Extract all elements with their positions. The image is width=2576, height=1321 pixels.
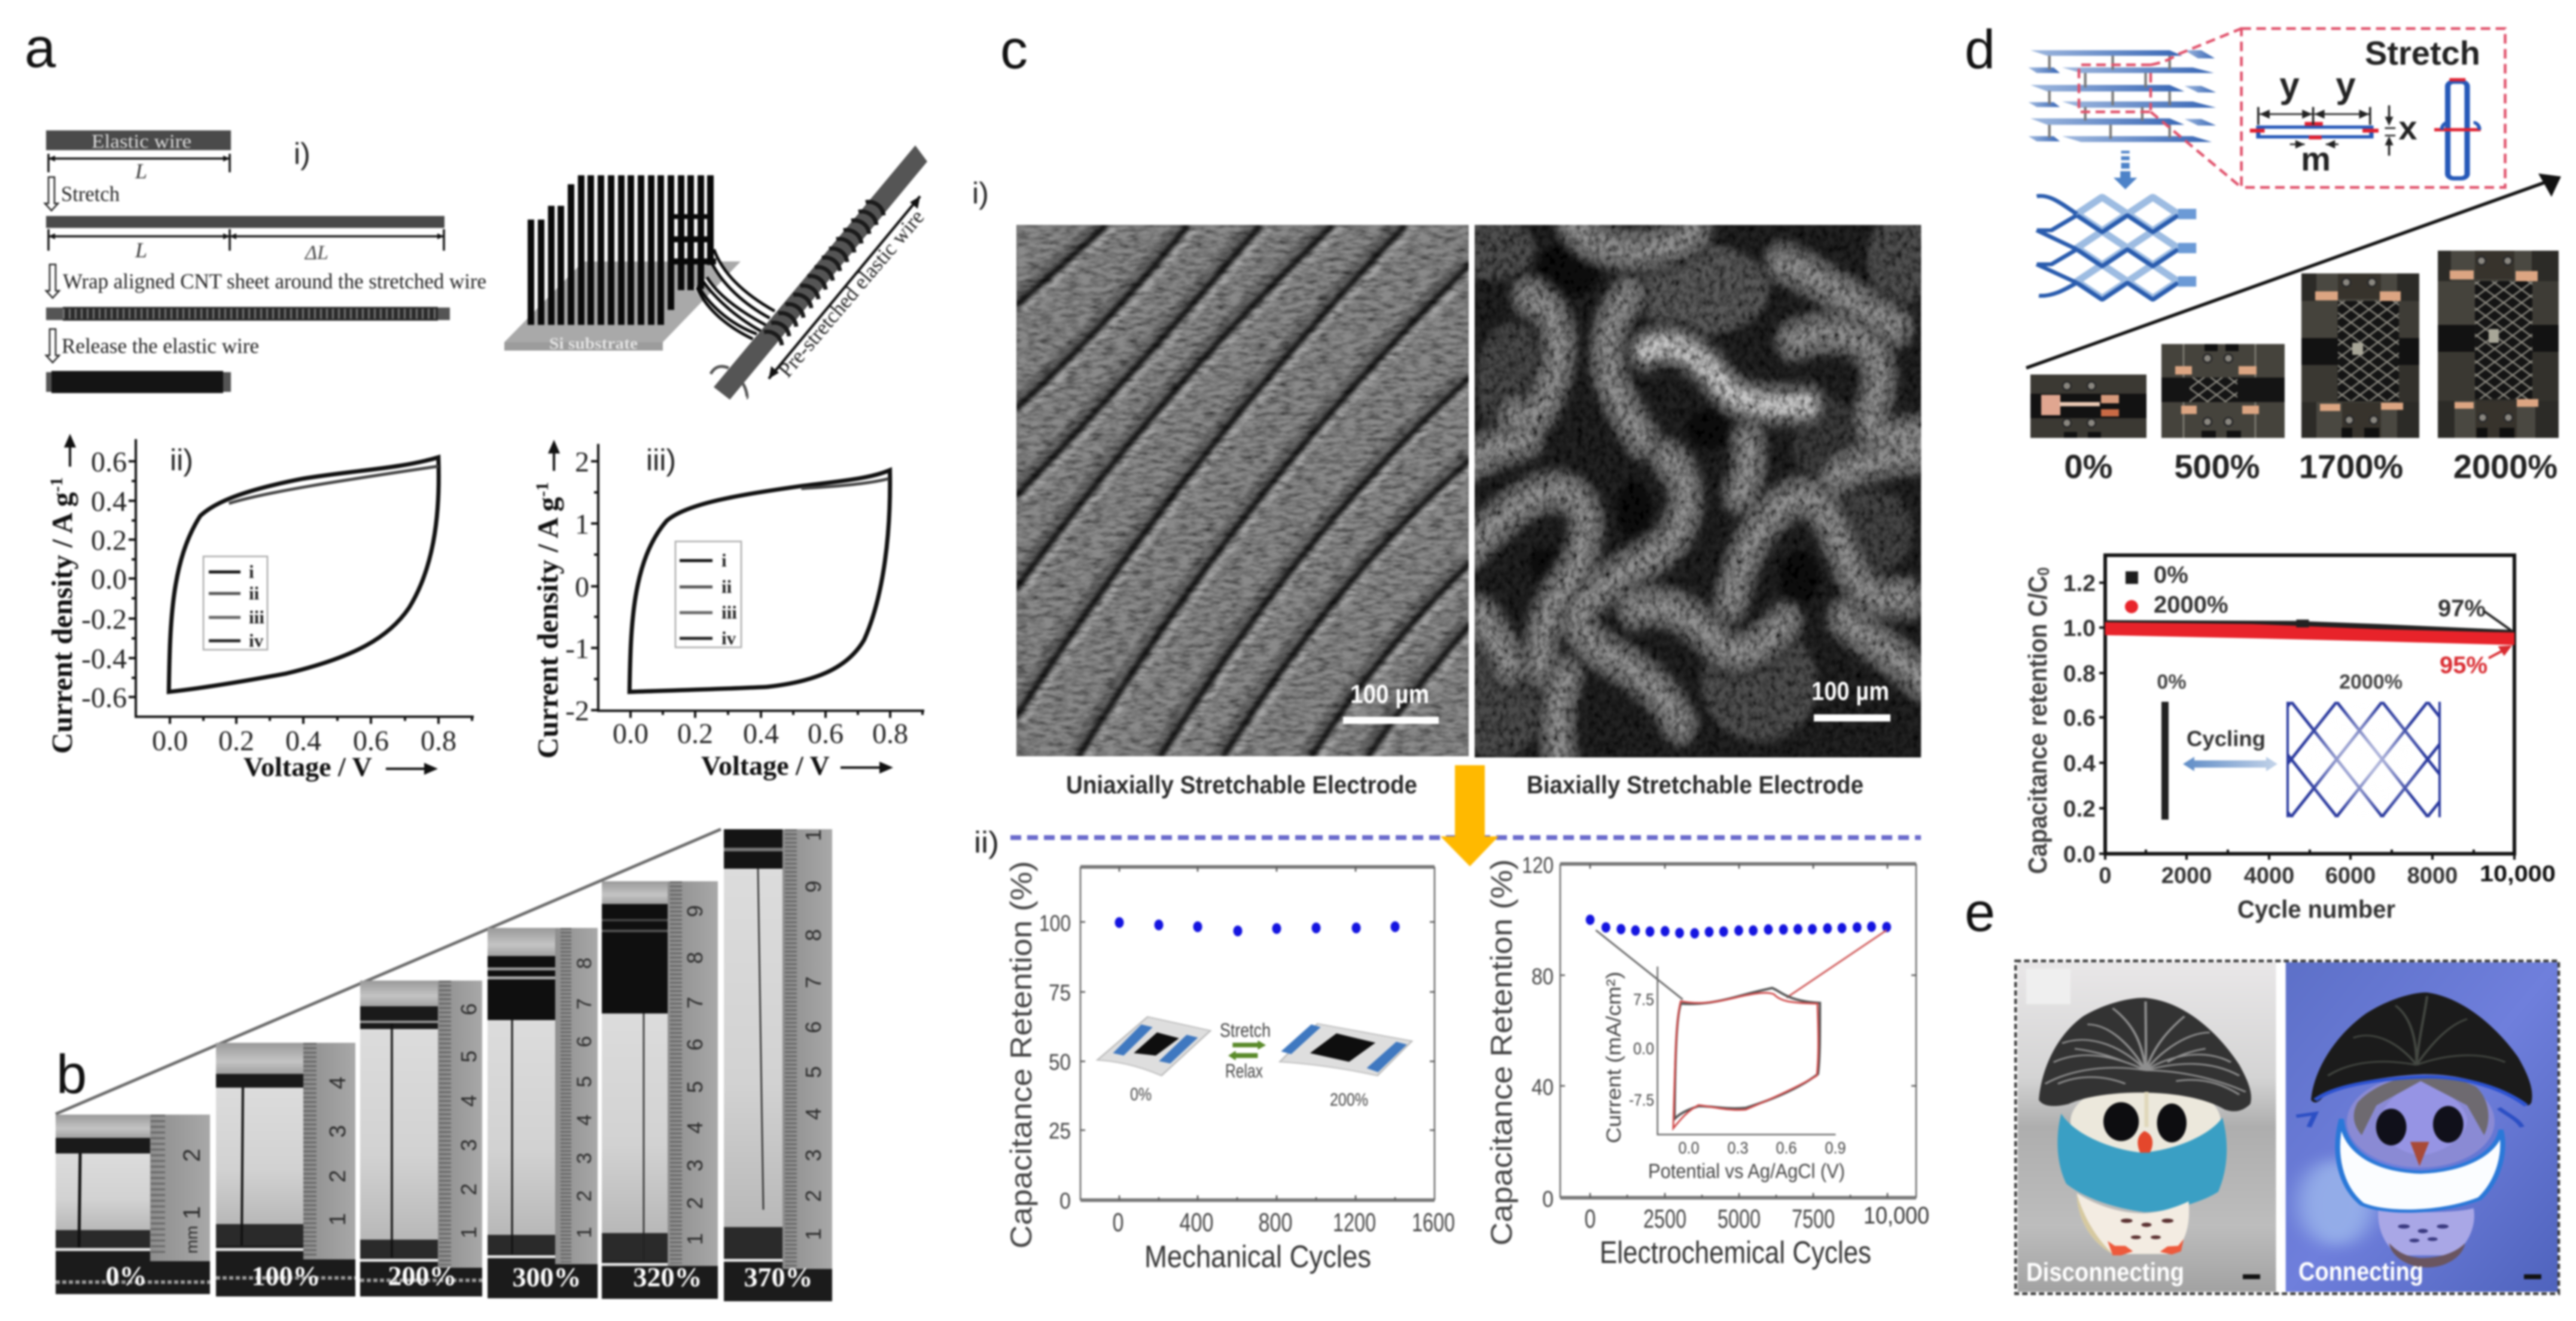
x tick labels <box>152 725 456 757</box>
y tick labels: 50 <box>1049 1050 1071 1075</box>
wire curl arrows <box>711 366 747 398</box>
inset: CV curve: -7.5 <box>1629 1091 1654 1109</box>
panel a i: fabrication schematic: L <box>135 238 147 262</box>
chart: electrochemical cycles <box>1485 853 1929 1270</box>
x tick label: 10,000: 10,000 <box>2480 862 2556 887</box>
legend: 0% <box>2154 562 2188 588</box>
y tick labels <box>1039 911 1071 1214</box>
diagram labels: y <box>2336 65 2356 105</box>
inset: stretch device <box>1097 1017 1412 1110</box>
photo: d 0% <box>2030 375 2146 438</box>
strain labels: 500% <box>2174 448 2260 485</box>
inset: CV curve: Potential vs Ag/AgCl (V) <box>1648 1160 1845 1183</box>
y tick labels: -0.2 <box>81 604 127 635</box>
photo: 300%: 300% <box>512 1262 581 1292</box>
photo: 370%: 3 <box>801 1149 826 1161</box>
y tick labels: 0 <box>1542 1187 1554 1212</box>
annotation: 95% <box>2440 647 2510 678</box>
y tick labels: 1.0 <box>2063 616 2096 641</box>
panel a i: fabrication schematic <box>45 130 486 393</box>
x tick labels: 400 <box>1180 1208 1213 1237</box>
y tick labels: -1 <box>565 633 589 665</box>
x tick labels: 8000 <box>2407 863 2458 888</box>
x tick labels: 2500 <box>1643 1204 1686 1234</box>
trend arrow <box>2026 174 2561 368</box>
photo: 320%: 5 <box>683 1081 707 1093</box>
y tick labels <box>2063 571 2096 868</box>
photo: 0%: 2 <box>179 1149 205 1162</box>
chart: a iii CV curves <box>531 443 924 781</box>
photo caption: connecting: Connecting <box>2298 1257 2423 1286</box>
schematic: CNT forest and pre-stretched wire <box>504 145 929 400</box>
wrapped wire <box>46 307 450 321</box>
x tick labels <box>2099 863 2458 888</box>
photo: d 1700% <box>2301 273 2419 438</box>
panel label: d: d <box>1965 19 1995 80</box>
photo: 320%: 6 <box>683 1039 707 1051</box>
y tick labels: 0.2 <box>91 525 127 556</box>
plot frame <box>2105 555 2514 854</box>
y tick labels: 100 <box>1039 911 1071 936</box>
annotation: 95%: 95% <box>2440 652 2487 678</box>
photo: 370%: 2 <box>801 1190 826 1202</box>
photo: 320%: 8 <box>683 952 707 964</box>
photo: 200%: 2 <box>456 1183 481 1195</box>
x tick labels: 2000 <box>2161 863 2212 888</box>
x tick labels: 0.0 <box>613 718 648 750</box>
inset: cycling diagram: 2000% <box>2339 671 2403 693</box>
diagram labels: m <box>2301 140 2331 178</box>
photo: d 2000% <box>2438 251 2559 438</box>
photo: 200%: 1 <box>456 1226 481 1238</box>
step label: wrap: Wrap aligned CNT sheet around the stretched wire <box>63 269 486 293</box>
CNT sheet strands <box>697 249 775 339</box>
chart: a ii CV curves <box>45 437 474 782</box>
x tick labels: 4000 <box>2244 863 2294 888</box>
strain labels: 2000% <box>2453 448 2557 485</box>
inset: cycling diagram: 0% <box>2157 671 2187 693</box>
y tick labels: 0 <box>575 571 589 603</box>
y axis title: Current density / A g <box>531 497 564 759</box>
double arrow along wire <box>769 196 920 379</box>
x axis title: Mechanical Cycles <box>1144 1240 1371 1274</box>
annotation: 97% <box>2438 595 2511 631</box>
photo: 300%: 8 <box>573 958 596 969</box>
y axis title: Current density / A g <box>45 492 78 754</box>
y axis title: Capacitance retention C/C <box>2023 546 2053 874</box>
y tick labels: 75 <box>1049 981 1071 1006</box>
sub-label: c i: i) <box>972 176 989 210</box>
y arrow <box>550 443 558 471</box>
step label: stretch: Stretch <box>61 182 120 206</box>
sub-label: c ii: ii) <box>974 826 999 859</box>
photo: 300%: 3 <box>573 1153 596 1164</box>
y tick labels: 0.4 <box>91 486 127 518</box>
x axis title: Voltage / V <box>701 750 830 781</box>
y tick labels: 0.0 <box>91 564 127 595</box>
micrograph: uniaxial electrode <box>1015 225 1479 760</box>
photo: 370%: 1 <box>801 829 826 841</box>
CNT forest bars <box>528 175 716 325</box>
data points <box>1586 915 1891 939</box>
x tick labels: 0 <box>2099 863 2112 888</box>
inset: CV curve: 0.0 <box>1679 1139 1699 1157</box>
legend: ii <box>721 576 732 597</box>
data bands <box>2105 620 2514 645</box>
y tick labels: 120 <box>1522 853 1554 878</box>
step label: release: Release the elastic wire <box>62 334 259 358</box>
y tick labels: 1.2 <box>2063 571 2096 596</box>
strain labels <box>2065 448 2557 485</box>
panel label: a: a <box>25 16 56 79</box>
x tick labels: 7500 <box>1792 1204 1835 1234</box>
photo: 100%: 3 <box>325 1125 351 1138</box>
photo: 300%: 2 <box>573 1191 596 1201</box>
hollow arrow: wrap <box>46 264 59 298</box>
photo: 370%: 4 <box>801 1108 826 1120</box>
legend: iii <box>249 607 264 628</box>
photo: 200%: 5 <box>456 1051 481 1063</box>
x tick labels: 0.6 <box>808 718 844 750</box>
wire label: Pre-stretched elastic wire <box>774 205 929 382</box>
photo: 320%: 1 <box>683 1233 707 1245</box>
inset: CV curve: 0.9 <box>1825 1139 1846 1157</box>
inset: stretch device: 0% <box>1130 1085 1152 1104</box>
photo: 300%: 4 <box>573 1115 596 1125</box>
photo: 370% <box>724 829 832 1301</box>
axes <box>591 444 924 718</box>
scale bar: left <box>2243 1274 2260 1279</box>
legend <box>675 541 741 649</box>
scale bar <box>1343 717 1439 724</box>
scale label: 100 µm <box>1350 680 1429 709</box>
legend <box>2125 562 2228 618</box>
sub-label: a i: i) <box>294 137 310 171</box>
x tick labels <box>613 718 908 750</box>
Si substrate: Si substrate <box>549 334 638 352</box>
photo: 320% <box>602 881 718 1299</box>
photo: 370%: 7 <box>801 976 826 988</box>
y tick labels: 80 <box>1531 964 1554 990</box>
x tick labels: 0.8 <box>872 718 908 750</box>
y tick labels <box>1522 853 1554 1212</box>
hollow arrow: release <box>46 329 59 363</box>
panel a i: fabrication schematic: L <box>135 159 147 183</box>
inset: CV curve: 0.3 <box>1728 1139 1748 1157</box>
photo: 320%: 4 <box>683 1122 707 1134</box>
x axis title: Cycle number <box>2237 895 2395 923</box>
elastic wire bar <box>46 130 231 153</box>
unit cell <box>2250 105 2395 156</box>
legend: ii <box>249 583 260 604</box>
dashed divider <box>1010 835 1921 840</box>
photo: 320%: 320% <box>633 1262 702 1292</box>
scale bar: right <box>2524 1274 2541 1279</box>
legend: i <box>721 550 727 571</box>
panel b: stretching photos <box>56 829 832 1301</box>
legend: iv <box>249 630 264 651</box>
diagram labels: Stretch <box>2365 34 2480 72</box>
panel label: c: c <box>1000 19 1028 80</box>
legend: iii <box>721 602 737 623</box>
mesh <box>2037 196 2196 300</box>
photo: 370%: 8 <box>801 929 826 941</box>
photo: 370%: 6 <box>801 1021 826 1033</box>
x tick labels: 800 <box>1259 1208 1292 1237</box>
plot frame <box>1560 864 1916 1198</box>
y tick labels: 0.8 <box>2063 661 2096 687</box>
chart: capacitance retention <box>2023 555 2556 923</box>
x tick labels <box>1113 1208 1455 1237</box>
photo: 0%: 1 <box>179 1206 205 1219</box>
photo: 320%: 2 <box>683 1197 707 1209</box>
x tick labels: 1200 <box>1333 1208 1376 1237</box>
x tick labels <box>1584 1204 1835 1234</box>
stacked sheets <box>2028 50 2216 142</box>
strain labels: 0% <box>2065 448 2112 485</box>
panel label: e: e <box>1965 882 1995 943</box>
inset: stretch device: Stretch <box>1220 1019 1271 1041</box>
Si substrate <box>504 261 741 352</box>
y tick labels: 0.6 <box>91 446 127 478</box>
curves <box>629 470 890 692</box>
diagram labels <box>2279 34 2480 178</box>
photo: 370%: 9 <box>801 881 826 893</box>
photo: 100%: 100% <box>251 1261 321 1291</box>
inset: cycling diagram <box>2157 671 2440 820</box>
yellow arrow <box>1441 765 1499 866</box>
curves <box>169 457 439 692</box>
x tick labels: 6000 <box>2325 863 2376 888</box>
trend line over strain photos <box>56 829 721 1114</box>
photo: 0%: 0% <box>105 1261 147 1291</box>
elastic wire <box>714 145 927 400</box>
photo: 370%: 370% <box>744 1262 812 1292</box>
x tick labels: 0 <box>1584 1204 1596 1234</box>
x tick label: 10,000: 10,000 <box>1864 1203 1929 1229</box>
photo: 100%: 2 <box>325 1170 351 1183</box>
y axis title: -1 <box>47 477 66 492</box>
y tick labels <box>81 446 127 714</box>
photo caption: disconnecting: Disconnecting <box>2026 1258 2184 1287</box>
diagram labels: x <box>2398 109 2417 147</box>
photo: 300%: 6 <box>573 1036 596 1047</box>
photo: disconnecting <box>2018 962 2276 1292</box>
y axis title: -1 <box>532 482 552 497</box>
photo: 0% <box>56 1115 210 1294</box>
diagram labels: y <box>2279 65 2300 105</box>
legend: i <box>249 561 254 582</box>
y tick labels: 25 <box>1049 1119 1071 1144</box>
released wire <box>46 371 231 393</box>
photo: 320%: 3 <box>683 1159 707 1171</box>
y arrow <box>66 437 74 467</box>
x tick labels: 5000 <box>1718 1204 1761 1234</box>
x tick labels: 1600 <box>1412 1208 1455 1237</box>
legend <box>203 556 267 651</box>
photo: 200%: 4 <box>456 1095 481 1107</box>
photo: d 500% <box>2161 344 2285 438</box>
sub-label: iii) <box>646 443 676 477</box>
data points <box>1115 917 1400 936</box>
inset: CV curve: Current (mA/cm²) <box>1603 972 1625 1143</box>
photo: 370%: 5 <box>801 1066 826 1078</box>
legend: 2000% <box>2154 592 2228 618</box>
inset: CV curve: 0.0 <box>1633 1039 1654 1058</box>
chart: mechanical cycles <box>1004 861 1455 1274</box>
y tick labels: 40 <box>1531 1075 1554 1100</box>
y axis title: Capacitance Retention (%) <box>1485 859 1518 1246</box>
wrapped CNT on wire <box>764 202 884 345</box>
scale bar <box>1814 714 1890 722</box>
photo: 100% <box>216 1043 355 1296</box>
axes <box>129 439 474 724</box>
y tick labels: 0.0 <box>2063 842 2096 868</box>
x arrow <box>386 765 435 773</box>
photo: 100%: 1 <box>325 1213 351 1226</box>
strain labels: 1700% <box>2299 448 2403 485</box>
stretched wire bar <box>46 216 444 228</box>
photo: 370%: 1 <box>801 1228 826 1240</box>
x axis title: Voltage / V <box>243 751 372 782</box>
inset: stretch device: Relax <box>1225 1060 1263 1082</box>
x axis title: Electrochemical Cycles <box>1600 1235 1871 1270</box>
photo: 300%: 1 <box>573 1227 596 1238</box>
y tick labels: 0.2 <box>2063 796 2096 822</box>
inset: CV curve <box>1596 930 1887 1183</box>
inset: CV curve: 0.6 <box>1776 1139 1797 1157</box>
inset: CV curve: 7.5 <box>1633 990 1654 1009</box>
annotation: 97%: 97% <box>2438 595 2486 622</box>
x tick labels: 0.2 <box>218 725 254 757</box>
photo: 300%: 7 <box>573 999 596 1009</box>
panel a i: fabrication schematic: ΔL <box>304 242 328 264</box>
x tick labels: 0.4 <box>285 725 321 757</box>
photo: 300%: 5 <box>573 1076 596 1087</box>
y tick labels: -2 <box>565 695 589 727</box>
y axis title: 0 <box>2034 567 2053 576</box>
dashed border <box>2015 961 2559 1293</box>
dashed detail box <box>2242 29 2505 187</box>
photo: 300% <box>488 928 598 1298</box>
sub-label: ii) <box>170 443 193 477</box>
caption: uniaxial: Uniaxially Stretchable Electrode <box>1066 771 1417 799</box>
photo: 100%: 4 <box>325 1076 351 1089</box>
photo: 200%: 3 <box>456 1139 481 1151</box>
scale label: 100 µm <box>1811 677 1889 706</box>
schematic: kirigami sheets <box>2028 29 2505 300</box>
inset: stretch device: 200% <box>1330 1090 1368 1110</box>
photo: 0%: mm <box>182 1226 201 1253</box>
caption: biaxial: Biaxially Stretchable Electrode <box>1527 771 1864 799</box>
x arrow <box>841 763 890 772</box>
photo: 200%: 6 <box>456 1003 481 1015</box>
micrograph: biaxial electrode <box>1449 215 1936 758</box>
photo: 200% <box>360 981 482 1296</box>
y axis title: Capacitance Retention (%) <box>1004 861 1038 1249</box>
x tick labels: 0.6 <box>353 725 389 757</box>
y tick labels: -0.4 <box>81 643 127 675</box>
panel e: owl photos <box>2015 961 2559 1293</box>
red dashed selection <box>2079 29 2242 187</box>
inset: cycling diagram: Cycling <box>2187 726 2266 751</box>
y tick labels <box>565 446 589 727</box>
y tick labels: 2 <box>575 446 589 478</box>
photo: 320%: 7 <box>683 997 707 1009</box>
stretched cell <box>2434 80 2481 178</box>
panel label: b: b <box>56 1044 87 1105</box>
photo: connecting <box>2286 962 2558 1292</box>
y tick labels: 0.4 <box>2063 751 2096 777</box>
y tick labels: -0.6 <box>81 682 127 714</box>
dashed blue arrow <box>2114 151 2137 190</box>
legend: iv <box>721 628 736 649</box>
photo: 200%: 200% <box>388 1261 457 1291</box>
y tick labels: 0 <box>1059 1189 1071 1214</box>
x tick labels: 0.2 <box>677 718 713 750</box>
elastic wire bar: Elastic wire <box>92 131 191 153</box>
photo: 320%: 9 <box>683 905 707 917</box>
y tick labels: 1 <box>575 509 589 540</box>
x tick labels: 0.8 <box>421 725 456 757</box>
x tick labels: 0.4 <box>743 718 779 750</box>
y tick labels: 0.6 <box>2063 705 2096 731</box>
x tick labels: 0 <box>1113 1208 1123 1237</box>
plot frame <box>1080 867 1435 1200</box>
x tick labels: 0.0 <box>152 725 188 757</box>
hollow arrow: stretch <box>45 177 58 211</box>
